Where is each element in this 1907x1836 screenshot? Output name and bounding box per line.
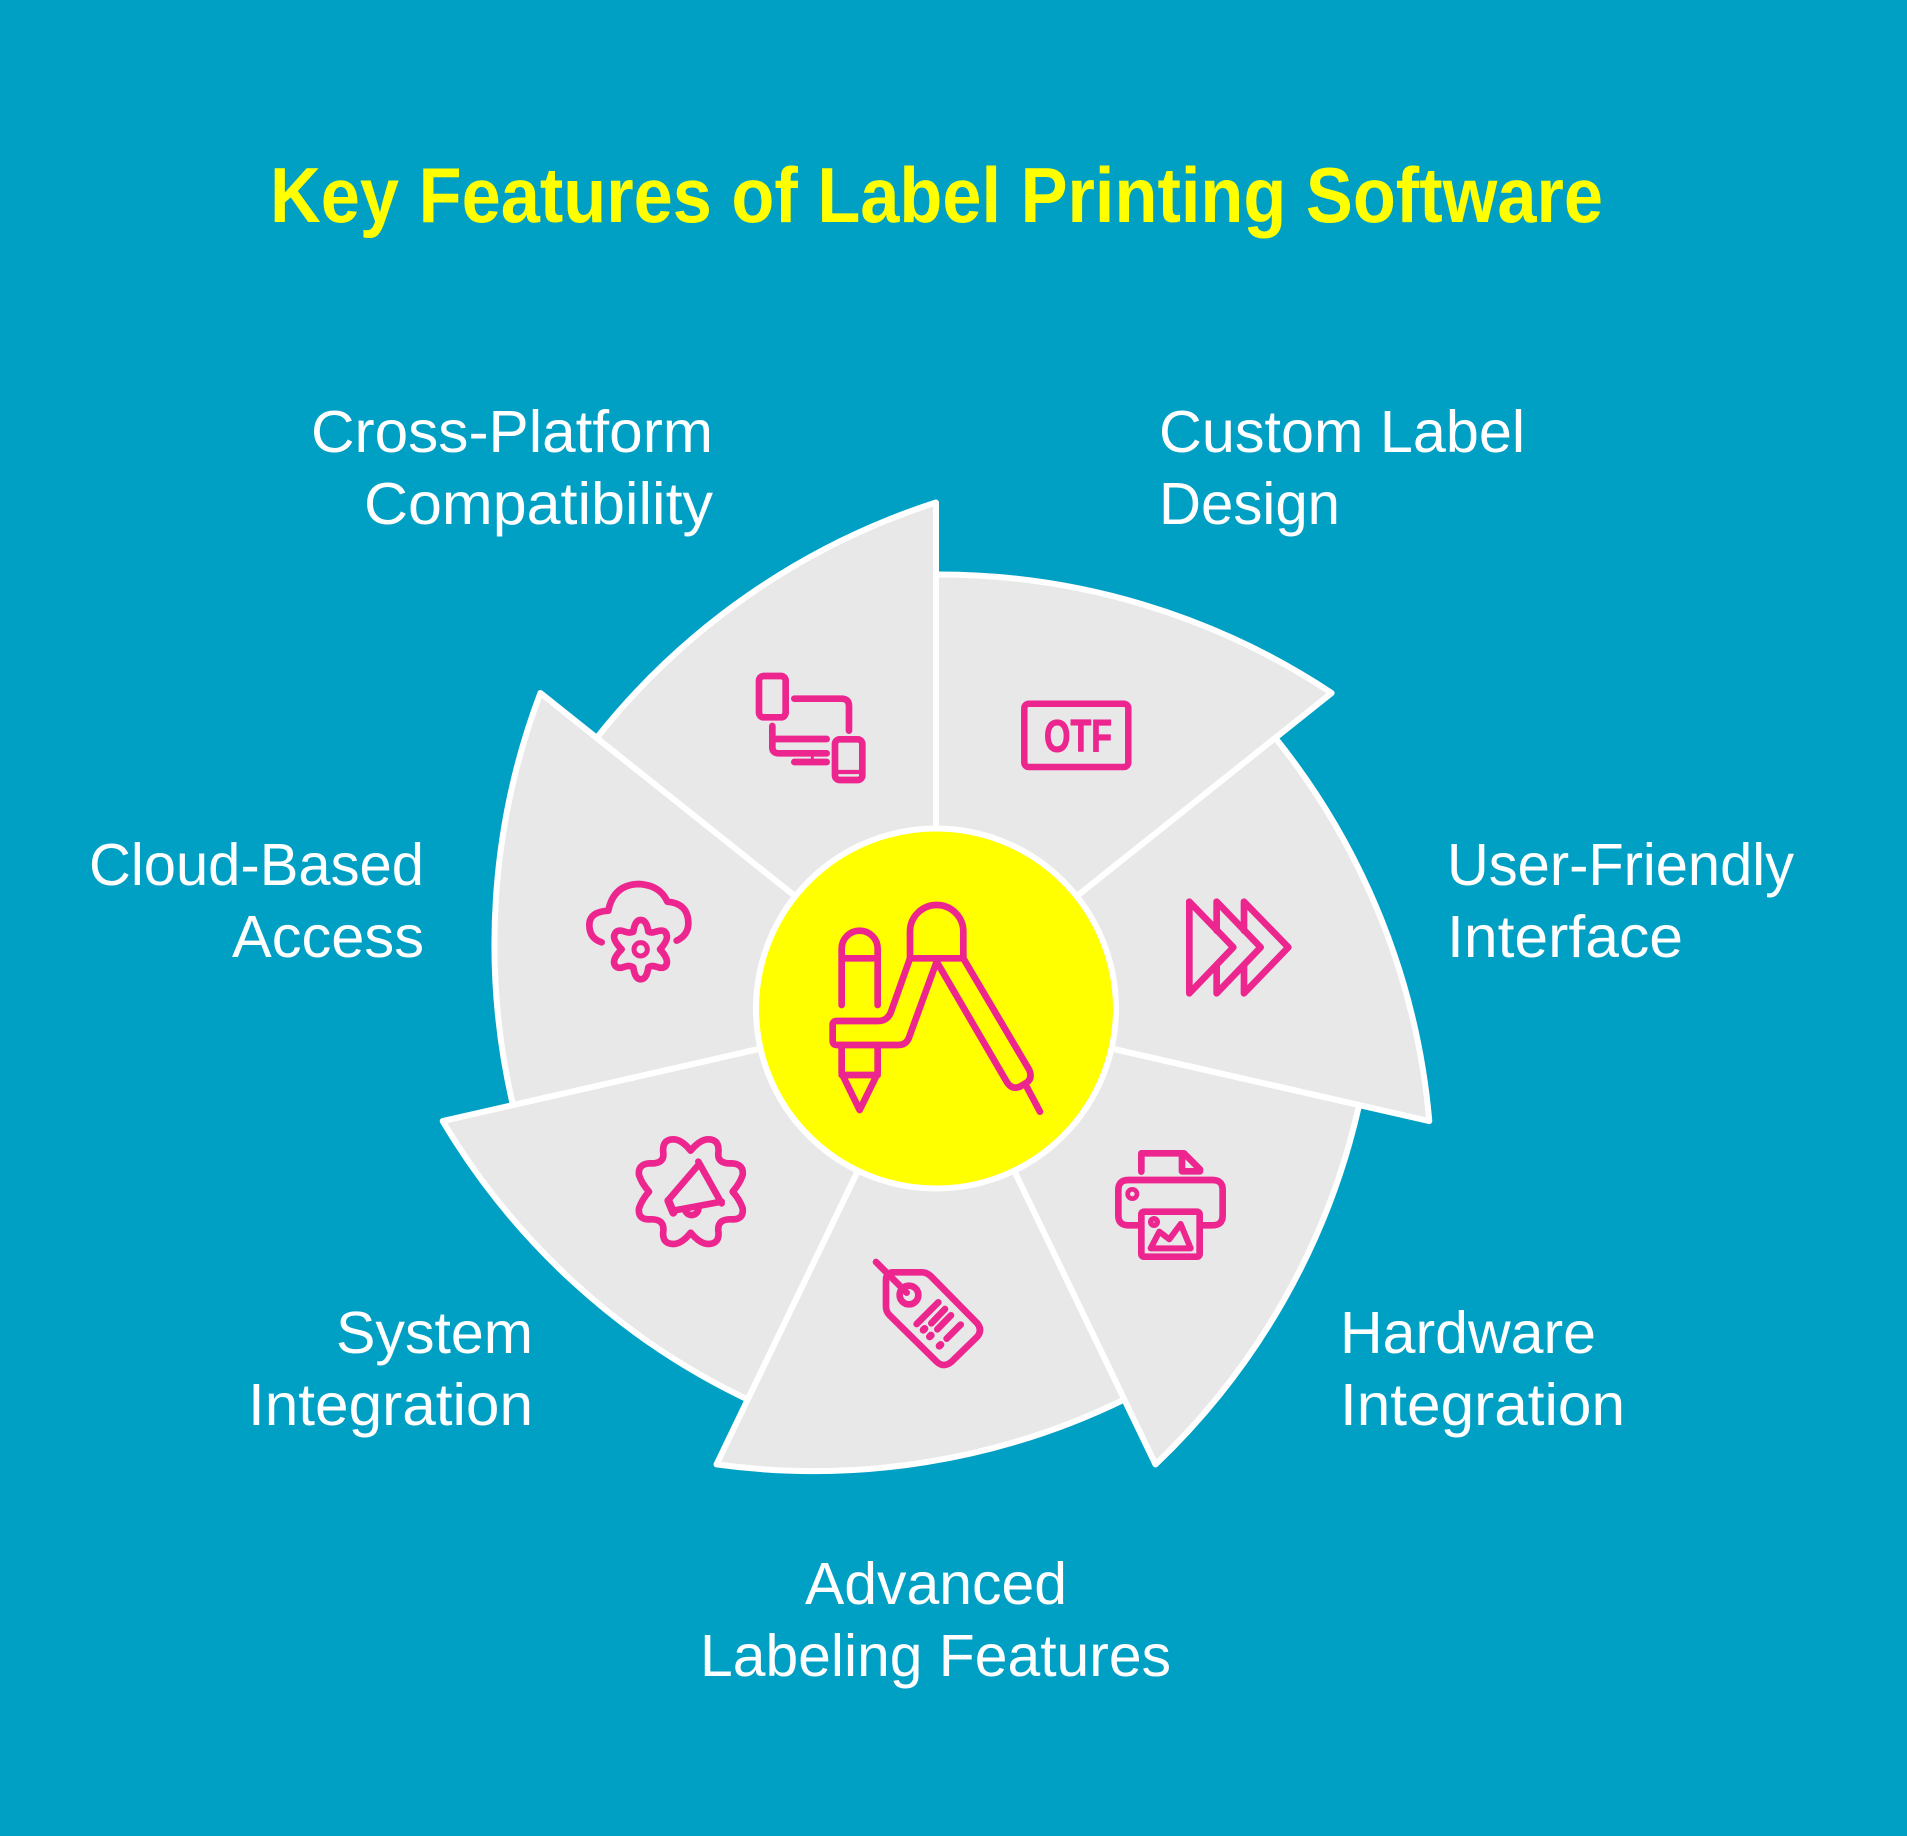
label: advanced labeling features bbox=[700, 1551, 1171, 1689]
segment: hardware integration bbox=[936, 1008, 1359, 1464]
label: hardware integration: Integration bbox=[1340, 1372, 1625, 1438]
label: cloud-based access: Access bbox=[232, 904, 424, 970]
label: cloud-based access: Cloud-Based bbox=[89, 832, 424, 898]
icon: fast-forward arrows bbox=[1189, 902, 1288, 993]
center circle bbox=[756, 828, 1116, 1188]
label: user-friendly interface bbox=[1447, 832, 1794, 970]
icon: barcode price tag bbox=[876, 1262, 980, 1365]
label: cross-platform compatibility: Cross-Platform bbox=[311, 399, 713, 465]
label: cross-platform compatibility: Compatibility bbox=[364, 471, 714, 537]
label: custom label design: Custom Label bbox=[1159, 399, 1525, 465]
icon: megaphone in gear bbox=[639, 1139, 743, 1244]
label: custom label design bbox=[1159, 399, 1525, 537]
segment: custom label design bbox=[936, 574, 1332, 1008]
label: user-friendly interface: User-Friendly bbox=[1447, 832, 1794, 898]
icon: drawing compass and pencil bbox=[833, 905, 1040, 1112]
label: system integration bbox=[248, 1300, 533, 1438]
icon: OTF label: OTF bbox=[1044, 710, 1112, 762]
label: system integration: Integration bbox=[248, 1372, 533, 1438]
label: hardware integration bbox=[1340, 1300, 1625, 1438]
segment: advanced labeling features bbox=[716, 1008, 1124, 1471]
radial wheel diagram bbox=[443, 502, 1429, 1471]
icon: devices bbox=[759, 676, 862, 780]
icon: cloud with gear bbox=[589, 884, 688, 979]
segment: user-friendly interface bbox=[936, 738, 1429, 1121]
label: hardware integration: Hardware bbox=[1340, 1300, 1596, 1366]
label: cloud-based access bbox=[89, 832, 424, 970]
label: system integration: System bbox=[336, 1300, 533, 1366]
segment: system integration bbox=[443, 1008, 936, 1400]
segment: cloud-based access bbox=[494, 693, 936, 1105]
label: cross-platform compatibility bbox=[311, 399, 714, 537]
label: advanced labeling features: Advanced bbox=[805, 1551, 1067, 1617]
icon: OTF label bbox=[1024, 704, 1128, 767]
icon: printer bbox=[1118, 1153, 1223, 1257]
label: advanced labeling features: Labeling Features bbox=[700, 1623, 1171, 1689]
segment: cross-platform compatibility bbox=[597, 502, 936, 1008]
title: Key Features of Label Printing Software bbox=[270, 151, 1603, 239]
label: custom label design: Design bbox=[1159, 471, 1340, 537]
label: user-friendly interface: Interface bbox=[1447, 904, 1683, 970]
